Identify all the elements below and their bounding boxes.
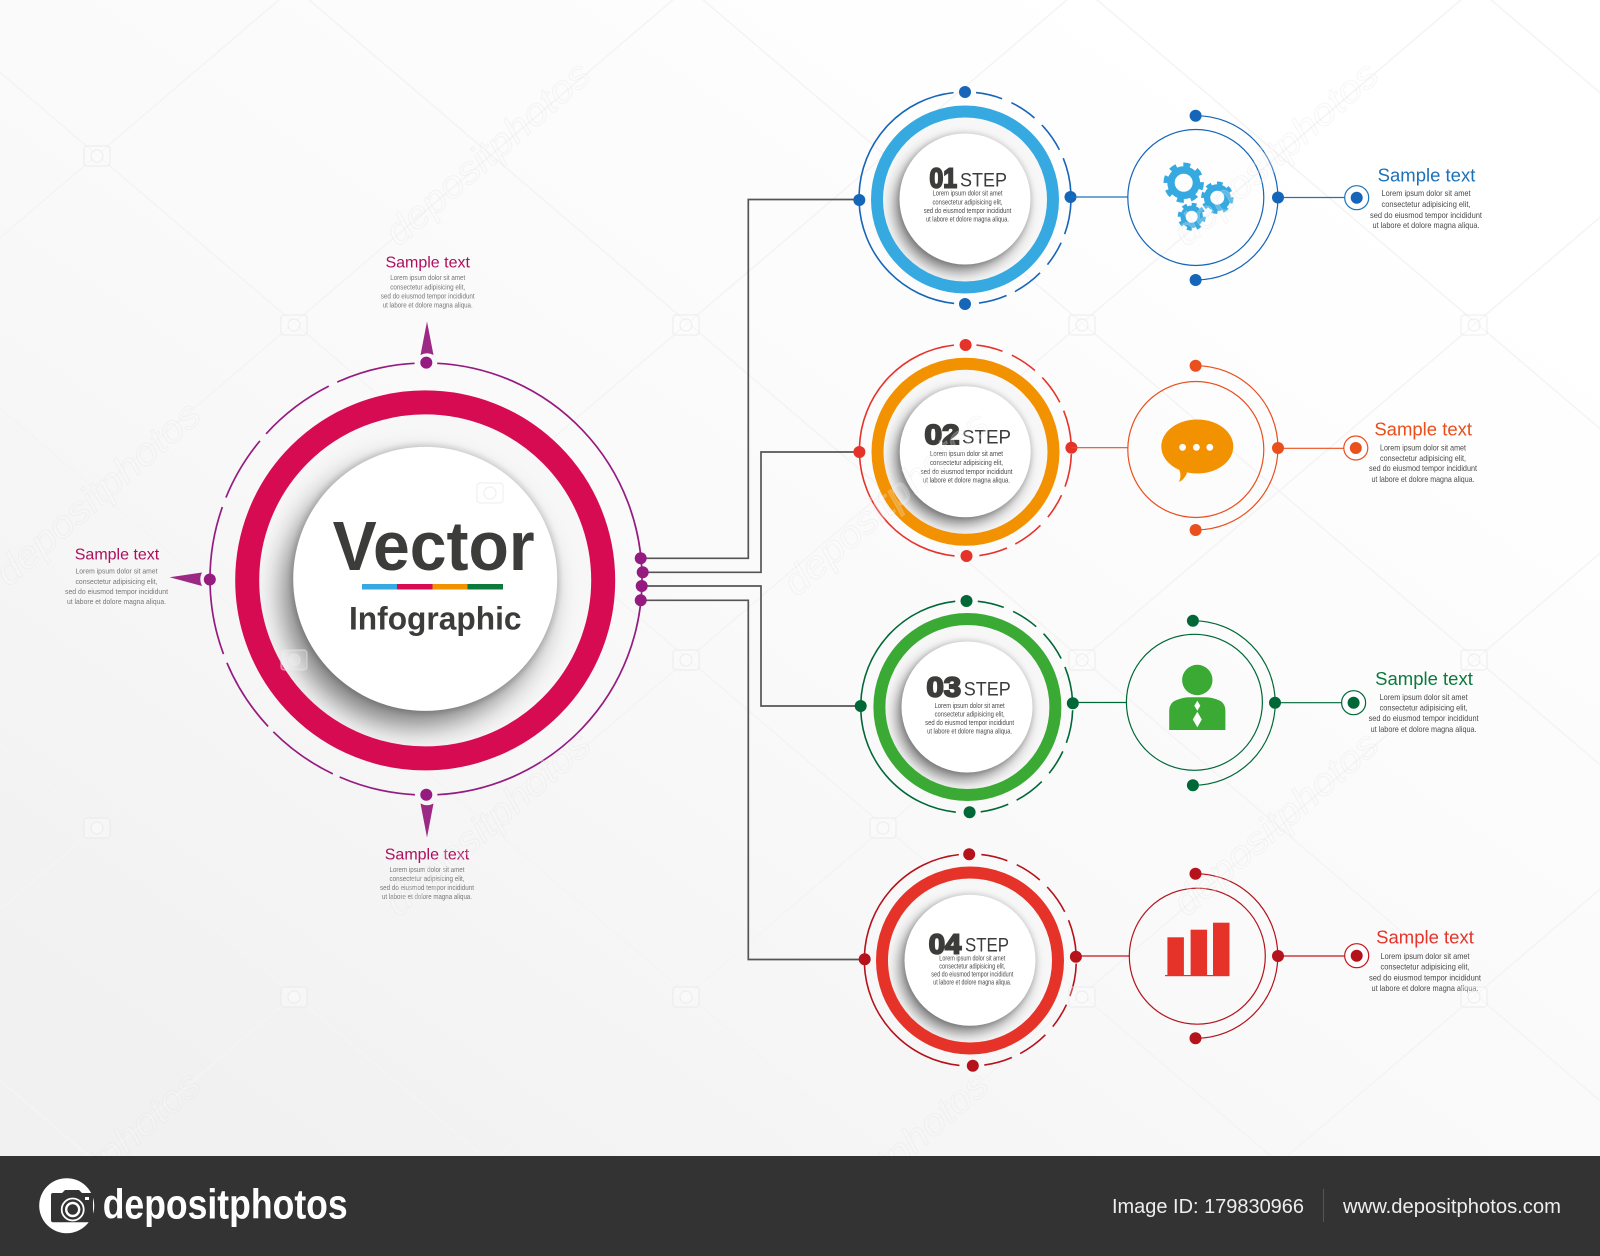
- hub crimson ring: [247, 402, 603, 758]
- step 04 text: sed do eiusmod tempor incididunt: [931, 971, 1013, 978]
- step 03 ring dots: [855, 595, 1079, 818]
- step 01 caption: Lorem ipsum dolor sit amet: [1382, 188, 1471, 198]
- step 04 icon ring: [1129, 874, 1278, 1038]
- step 04 ring dots: [859, 848, 1082, 1072]
- step 02 coloured ring: [878, 364, 1054, 540]
- step 02 ring dots: [853, 339, 1077, 562]
- step 01 caption: consectetur adipisicing elit,: [1382, 199, 1470, 209]
- footer band: [0, 1156, 1600, 1256]
- step 02 text: consectetur adipisicing elit,: [930, 460, 1003, 467]
- step 04 target: [1345, 944, 1369, 968]
- left caption: Lorem ipsum dolor sit amet: [76, 567, 158, 576]
- step 02 text: ut labore et dolore magna aliqua.: [923, 478, 1010, 485]
- step 02 disc: [884, 381, 1037, 534]
- top caption: consectetur adipisicing elit,: [390, 282, 465, 291]
- step 03 text: sed do eiusmod tempor incididunt: [925, 720, 1014, 727]
- step 01 number: STEP: [960, 171, 1007, 192]
- left caption: [65, 546, 169, 606]
- step 01 number: [930, 162, 1007, 193]
- step 03 number: [926, 672, 1011, 703]
- step 02 text: Lorem ipsum dolor sit amet: [930, 451, 1003, 458]
- step 03 caption: [1369, 668, 1479, 734]
- step 04 coloured ring: [882, 872, 1058, 1048]
- top caption: Lorem ipsum dolor sit amet: [390, 273, 466, 282]
- step 01 number: 01: [930, 162, 957, 193]
- panel: step 04: [859, 848, 1482, 1072]
- bottom caption: ut labore et dolore magna aliqua.: [382, 892, 472, 901]
- step 01 coloured ring: [877, 112, 1053, 288]
- watermarks: depositphotos: [377, 53, 599, 254]
- step 04 text: [931, 955, 1013, 986]
- step 04 number: [929, 928, 1009, 959]
- watermarks: depositphotos: [775, 403, 997, 604]
- left pointer: [170, 572, 216, 586]
- step 01 disc: [883, 128, 1039, 282]
- step 04 number: STEP: [965, 936, 1009, 957]
- hub colour bar: [362, 584, 503, 590]
- step 01 target: [1345, 186, 1369, 210]
- icon: person: [1169, 665, 1225, 730]
- step 03 caption: Lorem ipsum dolor sit amet: [1380, 692, 1468, 702]
- step 01 caption: ut labore et dolore magna aliqua.: [1372, 220, 1480, 230]
- step 02 caption: consectetur adipisicing elit,: [1380, 453, 1466, 463]
- panel: central hub: [65, 254, 649, 901]
- hub connector dots: [635, 552, 649, 606]
- step 02 caption: [1369, 418, 1478, 484]
- step 02 caption: sed do eiusmod tempor incididunt: [1369, 463, 1478, 473]
- bottom pointer: [420, 789, 434, 838]
- icon: bar chart: [1165, 923, 1230, 976]
- step 04 connector lines: [1076, 955, 1357, 957]
- bottom caption: Lorem ipsum dolor sit amet: [390, 865, 465, 874]
- logo wordmark: depositphotos: [103, 1180, 348, 1228]
- step 02 dashed ring: [859, 344, 1071, 556]
- top pointer: [420, 322, 434, 369]
- icon: speech bubble: [1161, 420, 1233, 482]
- step 01 connector lines: [1070, 196, 1357, 198]
- panel: step 02: [853, 339, 1478, 562]
- hub disc with shadow: [264, 440, 568, 746]
- step 01 text: [924, 191, 1011, 224]
- top caption: [381, 254, 475, 310]
- step 02 number: [924, 419, 1011, 450]
- icon: logo camera: [39, 1178, 94, 1233]
- bottom caption: sed do eiusmod tempor incididunt: [380, 883, 475, 892]
- step 03 text: Lorem ipsum dolor sit amet: [935, 703, 1005, 710]
- step 01 text: consectetur adipisicing elit,: [932, 200, 1003, 207]
- step 03 dashed ring: [861, 601, 1073, 813]
- step 03 number: STEP: [964, 680, 1011, 701]
- step 01 text: sed do eiusmod tempor incididunt: [924, 208, 1011, 215]
- hub dashed outer ring: [210, 363, 642, 795]
- step 03 caption: Sample text: [1375, 668, 1473, 689]
- step 01 text: Lorem ipsum dolor sit amet: [932, 191, 1003, 198]
- step 01 caption: [1370, 164, 1483, 230]
- bottom caption: Sample text: [385, 846, 470, 863]
- step 02 number: STEP: [962, 428, 1011, 448]
- step 04 caption: Sample text: [1376, 927, 1474, 948]
- step 03 number: 03: [926, 672, 961, 703]
- bottom caption: consectetur adipisicing elit,: [390, 874, 464, 883]
- watermarks: depositphotos: [1165, 53, 1387, 254]
- step 04 disc: [890, 890, 1041, 1042]
- step 04 caption: sed do eiusmod tempor incididunt: [1369, 972, 1482, 982]
- step 02 target: [1344, 436, 1368, 460]
- step 04 text: ut labore et dolore magna aliqua.: [933, 979, 1011, 986]
- step 02 caption: Lorem ipsum dolor sit amet: [1380, 442, 1467, 452]
- step 04 number: 04: [929, 928, 962, 959]
- step 04 text: consectetur adipisicing elit,: [939, 963, 1005, 970]
- hub title: Vector: Vector: [333, 507, 535, 585]
- icon: gears: [1166, 165, 1232, 229]
- panel: step 03: [855, 595, 1479, 818]
- step 03 caption: consectetur adipisicing elit,: [1380, 702, 1468, 712]
- step 03 icon dots: [1187, 615, 1281, 791]
- step 03 caption: ut labore et dolore magna aliqua.: [1371, 724, 1477, 734]
- step 02 icon ring: [1128, 366, 1278, 530]
- step 03 disc: [886, 636, 1038, 789]
- step 02 number: 02: [924, 419, 960, 450]
- step 02 connector lines: [1071, 447, 1356, 449]
- step 04 caption: Lorem ipsum dolor sit amet: [1380, 951, 1470, 961]
- step 01 ring dots: [853, 86, 1076, 310]
- step 03 coloured ring: [879, 619, 1055, 795]
- watermarks: depositphotos: [377, 723, 599, 924]
- image id: Image ID: 179830966: [1112, 1196, 1304, 1218]
- step 03 text: ut labore et dolore magna aliqua.: [927, 729, 1012, 736]
- step 01 dashed ring: [859, 92, 1071, 304]
- step 04 caption: consectetur adipisicing elit,: [1380, 962, 1470, 972]
- top caption: sed do eiusmod tempor incididunt: [381, 291, 475, 300]
- step 03 connector lines: [1073, 702, 1354, 704]
- step 04 text: Lorem ipsum dolor sit amet: [939, 955, 1005, 962]
- step 02 text: sed do eiusmod tempor incididunt: [920, 469, 1013, 476]
- step 02 text: [920, 451, 1013, 485]
- step 01 caption: sed do eiusmod tempor incididunt: [1370, 210, 1483, 220]
- step 01 icon dots: [1190, 110, 1284, 286]
- panel: step 01: [853, 86, 1483, 310]
- watermarks: depositphotos: [1165, 723, 1387, 924]
- step 04 icon dots: [1190, 868, 1284, 1044]
- connector lines from hub to steps: [641, 200, 865, 960]
- step 03 text: consectetur adipisicing elit,: [935, 712, 1005, 719]
- step 03 caption: sed do eiusmod tempor incididunt: [1369, 713, 1479, 723]
- bottom caption: [380, 846, 475, 901]
- step 04 caption: [1369, 927, 1482, 993]
- step 02 caption: Sample text: [1374, 418, 1472, 440]
- step 01 icon ring: [1128, 116, 1278, 280]
- step 03 text: [925, 703, 1014, 736]
- step 04 caption: ut labore et dolore magna aliqua.: [1372, 983, 1478, 993]
- step 02 icon dots: [1190, 360, 1284, 536]
- step 03 icon ring: [1126, 621, 1275, 785]
- step 01 caption: Sample text: [1378, 164, 1475, 186]
- left caption: consectetur adipisicing elit,: [76, 577, 158, 586]
- hub subtitle: Infographic: Infographic: [349, 600, 522, 636]
- step 02 caption: ut labore et dolore magna aliqua.: [1372, 474, 1474, 484]
- top caption: Sample text: [385, 254, 470, 272]
- top caption: ut labore et dolore magna aliqua.: [383, 301, 473, 310]
- site url: www.depositphotos.com: [1342, 1196, 1561, 1218]
- left caption: Sample text: [75, 546, 160, 563]
- step 04 dashed ring: [864, 854, 1076, 1066]
- left caption: sed do eiusmod tempor incididunt: [65, 587, 169, 596]
- left caption: ut labore et dolore magna aliqua.: [67, 597, 166, 606]
- step 03 target: [1342, 691, 1366, 715]
- step 01 text: ut labore et dolore magna aliqua.: [926, 217, 1009, 224]
